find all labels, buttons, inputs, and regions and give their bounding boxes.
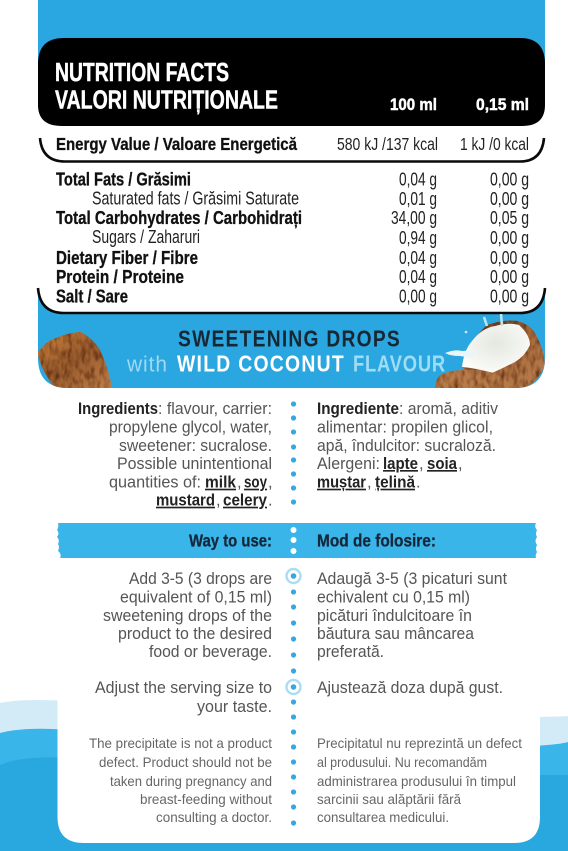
ingredients english: propylene glycol, water, (109, 419, 272, 437)
nutrient labels: Total Fats / Grăsimi (56, 170, 191, 190)
icon: target two (286, 680, 300, 694)
warning text romanian: consultarea medicului. (317, 809, 449, 825)
ingredients english: soy (244, 474, 268, 492)
values per 100 ml: 0,04 g (399, 248, 437, 268)
banner title: SWEETENING DROPS (178, 326, 401, 352)
usage steps romanian: picături îndulcitoare în (317, 607, 472, 625)
usage steps english: sweetening drops of the (103, 607, 272, 625)
ingredients english: . (268, 492, 273, 510)
nutrient labels: Dietary Fiber / Fibre (56, 248, 198, 268)
ingredients romanian (317, 400, 499, 492)
icon: left coconut (38, 332, 112, 388)
table header: black band (38, 38, 545, 126)
banner title: WILD COCONUT (177, 351, 345, 377)
values per 100 ml: 34,00 g (391, 208, 437, 228)
nutrient labels: Saturated fats / Grăsimi Saturate (92, 188, 299, 208)
values per 100 ml (391, 170, 437, 306)
warning text english: The precipitate is not a product (89, 735, 272, 751)
warning text english: defect. Product should not be (99, 754, 272, 770)
banner title: FLAVOUR (353, 351, 446, 377)
values per 0,15 ml (490, 170, 529, 306)
values per 0,15 ml: 0,00 g (490, 286, 529, 306)
ingredients romanian: țelină (375, 474, 416, 492)
warning text romanian: Precipitatul nu reprezintă un defect (317, 735, 522, 751)
warning text romanian: sarcinii sau alăptării fără (317, 791, 461, 807)
values per 100 ml: 0,01 g (399, 189, 437, 209)
energy row (56, 134, 529, 154)
ingredients romanian: Ingrediente (317, 400, 399, 418)
usage steps romanian: echivalent cu 0,15 ml) (317, 588, 470, 606)
values per 0,15 ml: 0,05 g (490, 208, 529, 228)
usage steps english: Add 3-5 (3 drops are (129, 570, 272, 588)
values per 0,15 ml: 0,00 g (490, 170, 529, 190)
section band: way to use (57, 523, 537, 558)
energy row: 1 kJ /0 kcal (460, 134, 529, 154)
usage steps english: food or beverage. (149, 643, 272, 661)
ingredients english: mustard (156, 492, 215, 510)
ingredients romanian: , (367, 474, 372, 492)
values per 0,15 ml: 0,00 g (490, 189, 529, 209)
ingredients english: , (237, 474, 242, 492)
dotted divider: ingredients (291, 401, 296, 505)
nutrient labels: Salt / Sare (56, 286, 128, 306)
heading: nutrition facts (55, 57, 278, 114)
lower coconut half (435, 370, 504, 388)
bottom waves background (0, 700, 568, 851)
energy row: 580 kJ /137 kcal (337, 134, 438, 154)
ingredients english: , (268, 474, 273, 492)
usage steps romanian: Adaugă 3-5 (3 picaturi sunt (317, 570, 507, 588)
values per 100 ml: 0,04 g (399, 267, 437, 287)
ingredients english: milk (205, 474, 237, 492)
icon: target one (286, 569, 300, 583)
heading: nutrition facts: VALORI NUTRIȚIONALE (55, 84, 278, 114)
warning text english: taken during pregnancy and (110, 773, 272, 789)
values per 100 ml: 0,04 g (399, 170, 437, 190)
usage steps english: product to the desired (118, 625, 272, 643)
warning text english: breast-feeding without (140, 791, 272, 807)
ingredients romanian: apă, îndulcitor: sucraloză. (317, 437, 496, 455)
values per 100 ml: 0,00 g (399, 286, 437, 306)
warning text romanian: al produsului. Nu recomandăm (317, 754, 487, 770)
icon: right coconut with milk splash (435, 314, 545, 388)
usage steps english: Adjust the serving size to (95, 679, 272, 697)
ingredients english: Possible unintentional (117, 455, 272, 473)
energy row: Energy Value / Valoare Energetică (56, 134, 297, 154)
ingredients romanian: alimentar: propilen glicol, (317, 419, 493, 437)
usage steps romanian: băutura sau mâncarea (317, 625, 475, 643)
ingredients romanian: , (419, 455, 424, 473)
ingredients romanian: muștar (317, 474, 367, 492)
values per 0,15 ml: 0,00 g (490, 228, 529, 248)
nutrient labels (56, 170, 302, 306)
ingredients english: quantities of: (109, 474, 201, 492)
values per 0,15 ml: 0,00 g (490, 248, 529, 268)
coconut shell (462, 320, 545, 388)
coconut flesh (462, 324, 530, 373)
ingredients romanian: , (458, 455, 463, 473)
blue top panel (38, 0, 545, 388)
milk splash (445, 350, 478, 358)
ingredients romanian: lapte (383, 455, 418, 473)
ingredients romanian: : aromă, aditiv (399, 400, 499, 418)
usage steps romanian: Ajustează doza după gust. (317, 679, 503, 697)
warning text romanian (317, 735, 522, 825)
usage steps english (95, 570, 272, 716)
usage steps english: your taste. (197, 698, 272, 716)
ingredients romanian: soia (427, 455, 458, 473)
usage steps romanian (317, 570, 507, 697)
nutrient labels: Total Carbohydrates / Carbohidrați (56, 208, 302, 228)
dotted divider with target icons (286, 569, 300, 826)
warning text english: consulting a doctor. (156, 809, 272, 825)
ingredients english: celery (223, 492, 268, 510)
warning text english (89, 735, 272, 825)
section band: way to use: Mod de folosire: (317, 531, 436, 551)
ingredients english (78, 400, 273, 510)
usage steps english: equivalent of 0,15 ml) (120, 588, 272, 606)
ingredients english: Ingredients (78, 400, 158, 418)
ingredients romanian: Alergeni: (317, 455, 380, 473)
section band: way to use: Way to use: (189, 531, 272, 551)
column headings: 0,15 ml (476, 95, 529, 114)
column headings: 100 ml (390, 95, 437, 114)
ingredients english: : flavour, carrier: (158, 400, 272, 418)
nutrition table (38, 38, 545, 314)
energy row outline (40, 138, 544, 162)
nutrient labels: Protein / Proteine (56, 267, 184, 287)
connecting dots (291, 589, 296, 826)
heading: nutrition facts: NUTRITION FACTS (55, 57, 229, 87)
white content card (58, 380, 540, 843)
warning text romanian: administrarea produsului în timpul (317, 773, 516, 789)
banner title: with (126, 352, 168, 377)
usage steps romanian: preferată. (317, 643, 384, 661)
ingredients english: sweetener: sucralose. (119, 437, 272, 455)
ingredients english: , (216, 492, 221, 510)
ingredients romanian: . (416, 474, 421, 492)
banner title (126, 326, 446, 377)
values per 0,15 ml: 0,00 g (490, 267, 529, 287)
values per 100 ml: 0,94 g (399, 228, 437, 248)
nutrient labels: Sugars / Zaharuri (92, 227, 200, 247)
column headings (390, 95, 529, 114)
table body (38, 90, 545, 314)
